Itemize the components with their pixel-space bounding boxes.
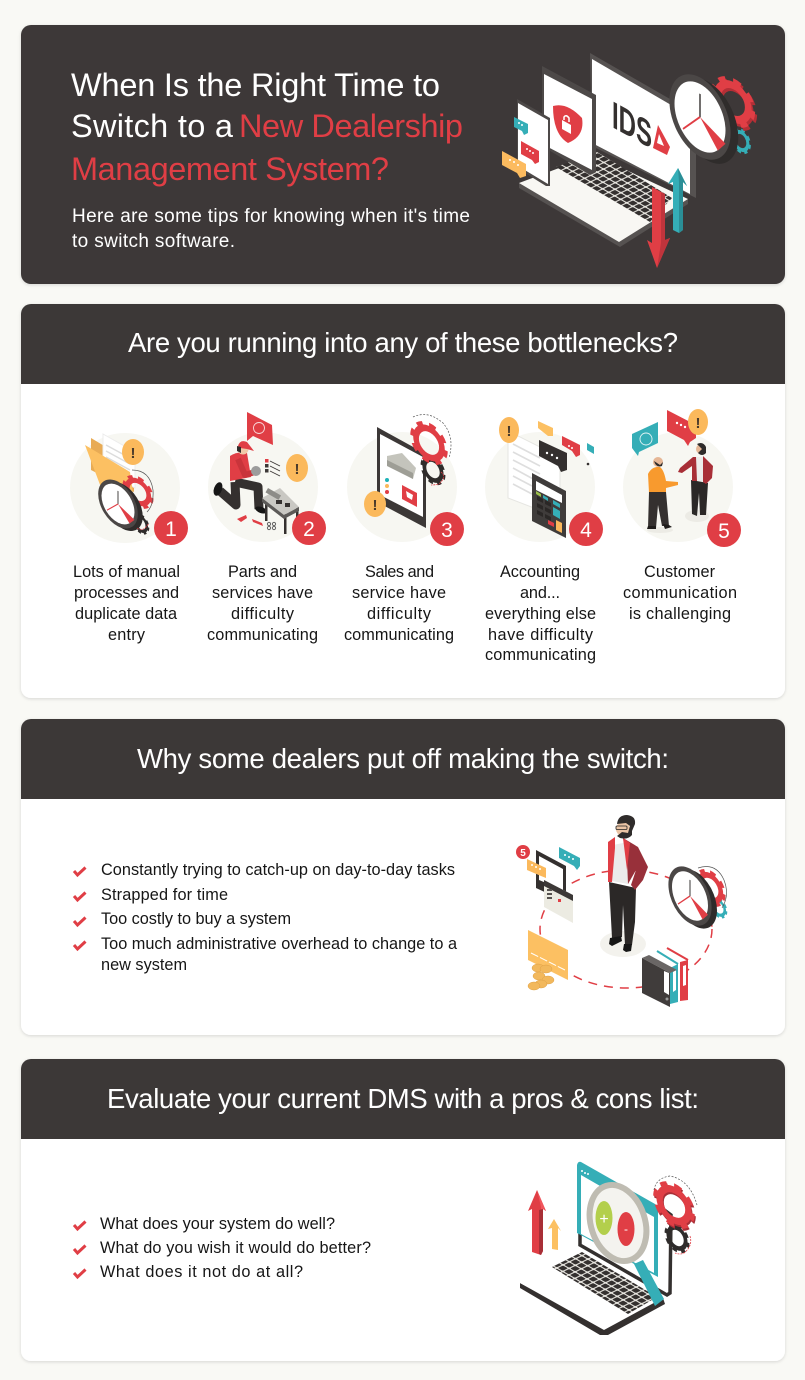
icon: tablet with gears bbox=[347, 415, 457, 542]
checklist: Constantly trying to catch-up on day-to-day tasks bbox=[101, 861, 455, 879]
label 2: Parts and bbox=[228, 563, 297, 581]
illustration: laptop with magnifier bbox=[520, 1162, 697, 1335]
label 3: communicating bbox=[344, 626, 454, 644]
label 4: everything else bbox=[485, 605, 596, 623]
label 5: Customer bbox=[644, 563, 716, 581]
label 4: Accounting bbox=[500, 563, 580, 581]
panel: why dealers delay bbox=[21, 719, 785, 1035]
badge 4 bbox=[569, 512, 603, 546]
label 3: difficulty bbox=[367, 605, 432, 623]
label 1: processes and bbox=[74, 584, 179, 602]
label 1 bbox=[73, 563, 180, 644]
heading: Why some dealers put off making the switch: bbox=[137, 743, 669, 774]
title: When Is the Right Time to bbox=[71, 67, 440, 103]
icon: mechanic at workbench: ! bbox=[294, 461, 300, 478]
checklist: Too much administrative overhead to change to a bbox=[101, 935, 458, 953]
checklist: Strapped for time bbox=[101, 886, 228, 904]
heading: Evaluate your current DMS with a pros & cons list: bbox=[107, 1083, 699, 1114]
badge 1 bbox=[154, 511, 188, 545]
label 4 bbox=[485, 563, 596, 664]
label 5 bbox=[623, 563, 737, 623]
label 3: Sales and bbox=[365, 563, 434, 581]
item 2 bbox=[207, 412, 326, 644]
badge 5: 5 bbox=[718, 520, 730, 543]
checklist: Too costly to buy a system bbox=[101, 910, 291, 928]
label 3: service have bbox=[352, 584, 446, 602]
badge 5 bbox=[707, 513, 741, 547]
item 3 bbox=[344, 415, 464, 644]
icon: mechanic at workbench bbox=[208, 412, 318, 542]
label 4: have difficulty bbox=[488, 626, 594, 644]
badge 2: 2 bbox=[303, 518, 315, 541]
badge 1: 1 bbox=[165, 518, 177, 541]
icon: folder, clock and gear bbox=[70, 433, 180, 543]
panel: bottlenecks bbox=[21, 304, 785, 698]
icon: document, calculator and bubbles: ! bbox=[506, 423, 512, 440]
label 2 bbox=[207, 563, 318, 644]
label 1: duplicate data bbox=[75, 605, 178, 623]
item 4 bbox=[485, 417, 603, 664]
illustration: laptop with magnifier: + bbox=[599, 1211, 609, 1228]
label 5: is challenging bbox=[629, 605, 731, 623]
item 1 bbox=[70, 433, 188, 644]
illustration: dealer surrounded by tasks: 5 bbox=[520, 848, 526, 859]
label 5: communication bbox=[623, 584, 737, 602]
title: Management System? bbox=[71, 151, 389, 187]
subtitle: to switch software. bbox=[72, 231, 235, 252]
illustration: laptop with magnifier: - bbox=[624, 1222, 628, 1236]
icon: tablet with gears: ! bbox=[372, 497, 378, 514]
illustration: laptop, tablet, phone, clock and arrows: IDS bbox=[612, 93, 652, 157]
label 1: entry bbox=[108, 626, 146, 644]
icon: two people talking bbox=[623, 409, 733, 542]
checklist: What does it not do at all? bbox=[100, 1263, 303, 1281]
label 2: services have bbox=[212, 584, 313, 602]
label 1: Lots of manual bbox=[73, 563, 180, 581]
badge 4: 4 bbox=[580, 519, 592, 542]
illustration: laptop, tablet, phone, clock and arrows bbox=[502, 53, 755, 268]
subtitle bbox=[72, 206, 470, 252]
panel: pros and cons bbox=[21, 1059, 785, 1361]
illustration: dealer surrounded by tasks bbox=[516, 815, 727, 1007]
checklist: new system bbox=[101, 956, 187, 974]
title: Switch to a bbox=[71, 108, 234, 144]
badge 3 bbox=[430, 512, 464, 546]
icon: document, calculator and bubbles bbox=[485, 417, 595, 542]
label 3 bbox=[344, 563, 454, 644]
checklist bbox=[74, 861, 458, 974]
title bbox=[71, 67, 463, 187]
label 4: communicating bbox=[485, 646, 596, 664]
checklist bbox=[74, 1215, 371, 1281]
badge 3: 3 bbox=[441, 519, 453, 542]
checklist: What does your system do well? bbox=[100, 1215, 335, 1233]
icon: folder, clock and gear: ! bbox=[130, 445, 136, 462]
label 4: and... bbox=[520, 584, 560, 602]
checklist: What do you wish it would do better? bbox=[100, 1239, 371, 1257]
icon: two people talking: ! bbox=[696, 415, 700, 432]
heading: Are you running into any of these bottlenecks? bbox=[128, 327, 678, 358]
label 2: difficulty bbox=[231, 605, 295, 623]
label 2: communicating bbox=[207, 626, 318, 644]
subtitle: Here are some tips for knowing when it's time bbox=[72, 206, 470, 227]
badge 2 bbox=[292, 511, 326, 545]
item 5 bbox=[623, 409, 741, 623]
panel: hero bbox=[21, 25, 785, 284]
title: New Dealership bbox=[239, 108, 463, 144]
